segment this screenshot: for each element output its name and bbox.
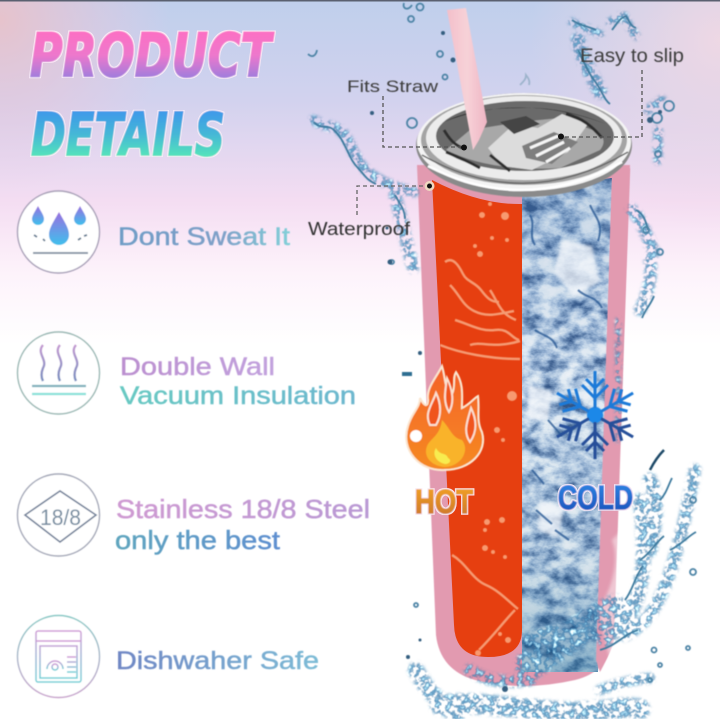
icon: hot flame bbox=[406, 366, 483, 470]
text: stainless 18/8 steel: Stainless 18/8 Steel bbox=[116, 494, 370, 524]
callout: easy to slip: Easy to slip bbox=[580, 46, 684, 67]
title: product details bbox=[30, 21, 274, 169]
water splash: white veil over the lower right wall bbox=[598, 530, 640, 660]
water splash: defined streaks bbox=[314, 16, 696, 650]
water droplets bbox=[308, 3, 696, 682]
hot half bbox=[432, 180, 522, 657]
water splash: mottled spray bbox=[314, 16, 695, 716]
text: double wall: Double Wall bbox=[120, 353, 275, 381]
text: vacuum insulation: Vacuum Insulation bbox=[120, 382, 356, 410]
text: dishwaher safe: Dishwaher Safe bbox=[116, 647, 319, 675]
icon: 18/8 badge bbox=[18, 474, 100, 556]
icon: water drops bbox=[18, 191, 100, 273]
callout: easy to slip bbox=[558, 46, 684, 140]
callout: waterproof: Waterproof bbox=[308, 219, 411, 239]
callout: fits straw bbox=[347, 77, 467, 150]
feature: dont sweat it bbox=[18, 191, 290, 273]
icon: snowflake bbox=[550, 371, 640, 459]
feature: dishwasher safe bbox=[18, 616, 319, 698]
tumbler bbox=[417, 165, 630, 686]
right wall bbox=[596, 168, 630, 672]
callout: waterproof bbox=[308, 181, 434, 239]
text: only the best: only the best bbox=[115, 525, 281, 555]
icon: heat waves bbox=[18, 332, 100, 414]
feature: stainless steel bbox=[18, 474, 370, 556]
title: product details: PRODUCT bbox=[30, 21, 274, 91]
ice half bbox=[520, 170, 615, 680]
straw bbox=[447, 8, 487, 150]
tumbler lid bbox=[416, 93, 632, 197]
tumbler body: pink shell bbox=[417, 165, 630, 686]
icon: 18/8 badge: 18/8 bbox=[40, 505, 81, 530]
title: product details: DETAILS bbox=[31, 100, 225, 169]
callout: fits straw: Fits Straw bbox=[347, 77, 439, 96]
feature: double wall vacuum insulation bbox=[18, 332, 356, 414]
text: dont sweat it: Dont Sweat It bbox=[118, 223, 290, 251]
dark droplets bbox=[370, 31, 662, 692]
label: cold: COLD bbox=[558, 479, 633, 516]
icon: dishwasher bbox=[18, 616, 100, 698]
label: hot: HOT bbox=[415, 483, 473, 520]
